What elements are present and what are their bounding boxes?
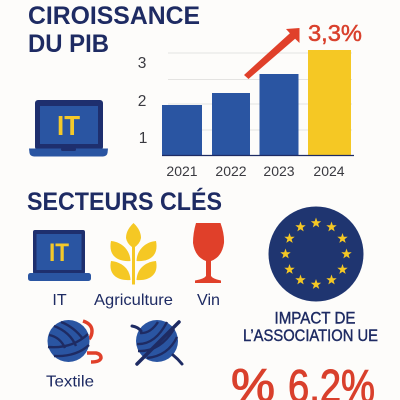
sector labels: IT [52,292,67,309]
icon: laptop IT [29,100,108,156]
x-axis labels: 2022 [215,163,247,179]
bar 2022 [212,93,250,155]
bar 2023 [260,74,298,155]
heading: EU association impact [243,310,378,345]
icon: laptop sector [28,230,91,281]
sector labels: Agriculture [94,292,173,309]
heading: EU association impact: IMPACT DE [274,310,356,328]
sector labels: Vin [197,292,220,309]
heading: EU association impact: L’ASSOCIATION UE [243,327,378,345]
sector labels [46,292,220,390]
sector labels: Textile [46,374,94,390]
x-axis labels [166,163,345,179]
icon: yarn ball with red thread [48,320,101,362]
heading: secteurs cles: SECTEURS CLÉS [27,187,222,216]
y-axis labels [138,55,147,147]
bar 2024 [308,50,351,155]
arrow [244,28,300,79]
icon: laptop IT: IT [57,110,80,141]
title: CIROISSANCE [28,2,200,30]
icon: wine glass [193,223,224,283]
value: 6,2% [231,359,375,400]
y-axis labels: 2 [138,93,146,110]
bar chart: GDP growth [138,50,354,179]
icon: EU flag [268,206,364,302]
title: DU PIB [28,30,109,58]
title [28,2,200,58]
x-axis labels: 2023 [263,163,295,179]
x-axis labels: 2024 [313,163,345,179]
x-axis labels: 2021 [166,163,198,179]
icon: wheat [110,223,157,284]
icon: yarn ball with needles [132,320,182,364]
y-axis labels: 1 [139,130,147,147]
value 3,3%: 3,3% [308,20,362,46]
bar 2021 [162,105,202,155]
icon: laptop sector: IT [49,239,69,267]
y-axis labels: 3 [138,55,146,72]
